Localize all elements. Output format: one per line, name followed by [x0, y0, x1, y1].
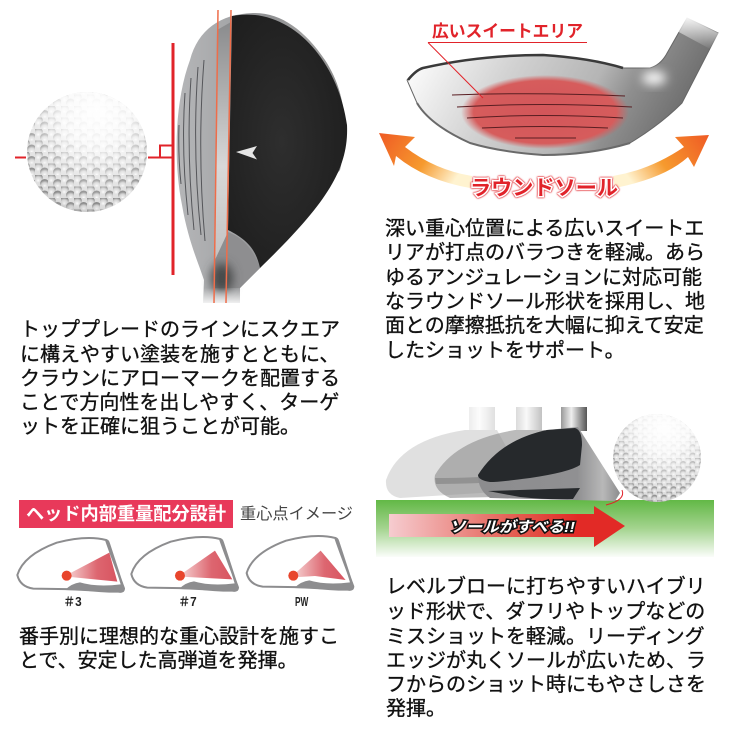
orange top-blade lines — [214, 10, 231, 303]
club head: face view — [407, 15, 722, 155]
CG diagram: PW: PW — [295, 595, 308, 609]
text block: sweet area and round sole — [385, 218, 705, 362]
CG diagram: #7: ＃7 — [178, 595, 197, 609]
black crown — [228, 15, 347, 268]
round sole arrows — [379, 133, 709, 188]
text block: level blow: 発揮。 — [386, 698, 446, 720]
alignment guide: red right angle — [15, 43, 173, 275]
text block: level blow: ミスショットを軽減。リーディング — [386, 626, 705, 648]
sweet area label: 広いスイートエリア — [432, 22, 583, 41]
faded head 1 — [386, 407, 530, 498]
text block: sweet area and round sole: したショットをサポート。 — [385, 340, 625, 362]
CG diagram: #7 — [131, 537, 239, 609]
text block: level blow: レベルブローに打ちやすいハイブリ — [386, 576, 706, 598]
text block: alignment: ットを正確に狙うことが可能。 — [20, 416, 300, 438]
club head: top view — [177, 10, 347, 306]
golf ball: address view — [27, 92, 147, 212]
text block: center of gravity — [19, 626, 339, 672]
faded head 2 — [435, 407, 590, 498]
text block: sweet area and round sole: 深い重心位置による広いスイートエ — [385, 218, 704, 240]
face grooves — [179, 60, 205, 241]
text block: level blow — [386, 576, 706, 720]
CG diagram: #3: ＃3 — [63, 595, 82, 609]
text block: level blow: エッジが丸くソールが広いため、ラ — [386, 650, 706, 672]
text block: sweet area and round sole: リアが打点のバラつきを軽減。あら — [385, 242, 705, 264]
front black head — [561, 407, 587, 431]
text block: alignment: トッププレードのラインにスクエア — [20, 319, 340, 341]
text block: alignment: ことで方向性を出しやすく、ターゲ — [20, 392, 339, 414]
round sole label: ラウンドソール — [470, 177, 618, 200]
text block: alignment: に構えやすい塗装を施すとともに、 — [20, 344, 339, 366]
heading bar: internal weight distribution — [19, 500, 233, 528]
sliding arrow: ソールがすべる!! — [449, 519, 575, 536]
text block: sweet area and round sole: ゆるアンジュレーションに対応可能 — [385, 267, 702, 289]
sliding arrow — [389, 506, 625, 547]
text block: level blow: ッド形状で、ダフリやトップなどの — [386, 601, 705, 623]
CG diagram: PW — [247, 536, 354, 609]
text block: sweet area and round sole: なラウンドソール形状を採用し、地 — [385, 291, 705, 313]
red contact mark — [606, 490, 623, 505]
sliding club heads — [386, 407, 620, 501]
arrow mark — [236, 146, 257, 160]
CG diagram: #3 — [17, 538, 125, 609]
sweet area — [461, 75, 629, 149]
turf band — [376, 500, 714, 557]
text block: sweet area and round sole: 面との摩擦抵抗を大幅に抑えて安定 — [385, 315, 704, 337]
heading bar: internal weight distribution: ヘッド内部重量配分設計 — [26, 504, 226, 524]
golf ball: impact view — [613, 414, 701, 502]
sweet area label — [428, 22, 587, 98]
text block: center of gravity: 番手別に理想的な重心設計を施すこ — [19, 626, 339, 648]
score lines — [452, 94, 632, 138]
text block: center of gravity: とで、安定した高弾道を発揮。 — [19, 650, 298, 672]
subheading: center of gravity image: 重心点イメージ — [240, 505, 353, 523]
text block: level blow: フからのショット時にもやさしさを — [386, 674, 706, 696]
text block: alignment — [20, 318, 340, 438]
text block: alignment: クラウンにアローマークを配置する — [20, 368, 340, 390]
